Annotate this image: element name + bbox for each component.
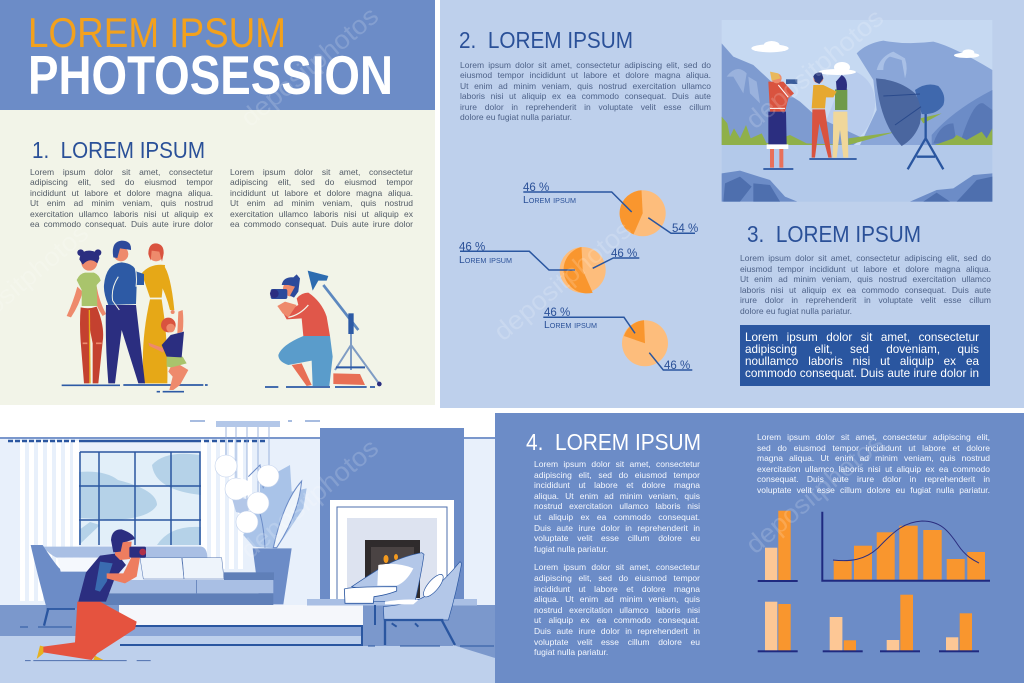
small bar chart 5	[939, 613, 979, 652]
clouds	[751, 41, 979, 75]
text block: section 1 column 1: Lorem ipsum dolor sit amet, consectetur	[30, 166, 213, 176]
text block: section 4 right column: consequat. Duis aute irure dolor in reprehenderit in	[757, 474, 990, 484]
text block: section 3: Lorem ipsum dolor sit amet, consectetur adipiscing elit, sed do	[740, 253, 991, 263]
text block: section 4 paragraph 2: aliqua. Ut enim ad minim veniam, quis	[534, 594, 700, 604]
watermark: depositphotos	[235, 432, 384, 565]
text block: section 4 paragraph 1	[534, 459, 700, 554]
small bar chart 4	[880, 595, 920, 652]
mother	[142, 243, 175, 383]
text block: section 4 paragraph 1: Lorem ipsum dolor sit amet, consectetur	[534, 459, 700, 469]
small bar chart 1	[758, 511, 798, 582]
text block: section 4 paragraph 1: incididunt ut labore et dolore magna	[534, 480, 700, 490]
heading 4: 4. LOREM IPSUM	[526, 429, 701, 455]
callout: section 3 highlighted text: commodo consequat. Duis aute irure dolor in	[745, 367, 979, 380]
panel: dark blue section background	[495, 413, 1024, 683]
text block: section 3	[740, 253, 991, 316]
illustration: kneeling photographer with studio light	[265, 271, 382, 387]
pie chart 2: Lorem ipsum	[459, 255, 512, 266]
rug	[119, 605, 363, 646]
videographer	[763, 72, 797, 169]
text block: section 1 column 1: exercitation ullamco laboris nisi ut aliquip ex	[30, 209, 213, 219]
left mountain	[722, 43, 863, 145]
text block: section 4 paragraph 1: Duis aute irure dolor in reprehenderit in	[534, 523, 700, 533]
text block: section 4 paragraph 2: incididunt ut labore et dolore magna	[534, 584, 700, 594]
histogram with curve	[822, 512, 990, 581]
panel: title banner background	[0, 0, 435, 110]
text block: section 4 right column: magna aliqua. Ut enim ad minim veniam, quis nostrud	[757, 453, 990, 463]
pie chart 1: 46 %	[523, 182, 549, 194]
panel: cream section background	[0, 110, 435, 405]
illustration: mountain photoshoot scene	[722, 20, 992, 202]
pie chart 1	[523, 182, 698, 236]
sweater	[283, 293, 330, 336]
wall	[0, 438, 495, 606]
text block: section 4 paragraph 2: fugiat nulla pariatur.	[534, 647, 608, 657]
panel: light blue section background	[440, 0, 1024, 408]
right mountain	[932, 90, 992, 145]
pie chart 1: Lorem ipsum	[523, 195, 576, 206]
text block: section 4 paragraph 1: aliqua. Ut enim ad minim veniam, quis	[534, 491, 700, 501]
kneeling photographer in room	[25, 529, 151, 661]
sofa	[31, 545, 274, 626]
text block: section 1 column 1: ea commodo consequat. Duis aute irure dolor	[30, 219, 213, 229]
heading 2: 2. LOREM IPSUM	[459, 27, 633, 53]
text block: section 4 right column: Lorem ipsum dolor sit amet, consectetur adipiscing elit,	[757, 432, 990, 442]
text block: section 4 paragraph 2: voluptate velit esse cillum dolore eu	[534, 637, 700, 647]
text block: section 4 right column: voluptate velit esse cillum dolore eu fugiat nulla pariatur.	[757, 485, 990, 495]
child	[148, 310, 188, 390]
text block: section 2: laboris nisi ut aliquip ex ea commodo consequat. Duis aute	[460, 91, 711, 101]
title: photosession: PHOTOSESSION	[28, 44, 393, 106]
heading 1: 1. LOREM IPSUM	[32, 137, 205, 163]
text block: section 1 column 2: Ut enim ad minim veniam, quis nostrud	[230, 198, 413, 208]
text block: section 3: laboris nisi ut aliquip ex ea commodo consequat. Duis aute	[740, 285, 991, 295]
text block: section 2: irure dolor in reprehenderit in voluptate velit esse cillum	[460, 102, 711, 112]
text block: section 3: eiusmod tempor incididunt ut labore et dolore magna aliqua.	[740, 264, 991, 274]
text block: section 1 column 1: adipiscing elit, sed do eiusmod tempor	[30, 177, 213, 187]
callout: section 3 highlighted text: adipiscing elit, sed doveniam, quis	[745, 343, 979, 356]
pendant lamp	[215, 427, 279, 533]
rocks	[722, 171, 797, 202]
far mountain	[857, 41, 992, 145]
pie chart 2: 46 %	[459, 242, 485, 254]
text block: section 3: dolore eu fugiat nulla pariatur.	[740, 306, 852, 316]
window	[79, 452, 201, 545]
girl	[67, 249, 106, 383]
text block: section 4 right column	[757, 432, 990, 495]
ground	[722, 145, 992, 202]
light stand	[308, 271, 382, 386]
text block: section 1 column 2: Lorem ipsum dolor sit amet, consectetur	[230, 166, 413, 176]
ground lines	[62, 385, 208, 392]
pie chart 1: 54 %	[672, 223, 698, 235]
pie chart 3: Lorem ipsum	[544, 320, 597, 331]
callout: section 3 highlighted text: noullamco laboris nisi ut aliquip ex ea	[745, 355, 979, 368]
text block: section 4 right column: exercitation ullamco laboris nisi ut aliquip ex ea commodo	[757, 464, 990, 474]
father	[104, 241, 145, 383]
text block: section 4 paragraph 2: Lorem ipsum dolor sit amet, consectetur	[534, 562, 700, 572]
head	[283, 281, 298, 296]
text block: section 4 paragraph 1: adipiscing elit, sed do eiusmod tempor	[534, 470, 700, 480]
callout: section 3 highlighted text	[740, 325, 990, 386]
text block: section 4 paragraph 2: nostrud exercitation ullamco laboris nisi	[534, 605, 700, 615]
illustration: living room scene	[0, 421, 495, 683]
small bar chart 3	[823, 617, 863, 652]
text block: section 2: Lorem ipsum dolor sit amet, consectetur adipiscing elit, sed do	[460, 60, 711, 70]
text block: section 4 paragraph 2: Duis aute irure dolor in reprehenderit in	[534, 626, 700, 636]
title: lorem ipsum: LOREM IPSUM	[28, 9, 286, 56]
text block: section 1 column 1: incididunt ut labore et dolore magna aliqua.	[30, 188, 213, 198]
watermark: depositphotos	[740, 427, 889, 560]
text block: section 1 column 1	[30, 166, 213, 229]
pie chart 3: 46 %	[544, 307, 570, 319]
back foot	[292, 363, 365, 386]
text block: section 2: eiusmod tempor incididunt ut labore et dolore magna aliqua.	[460, 70, 711, 80]
armchairs	[344, 553, 462, 645]
camera	[271, 289, 287, 299]
ground lines	[265, 384, 375, 389]
text block: section 2	[460, 60, 711, 122]
pie chart 2	[459, 242, 639, 293]
text block: section 3: Ut enim ad minim veniam, quis nostrud exercitation ullamco	[740, 274, 991, 284]
fireplace	[307, 428, 477, 606]
floor dashes	[20, 627, 494, 646]
grass	[722, 113, 992, 145]
text block: section 4 paragraph 2	[534, 562, 700, 657]
illustration: family posing	[62, 241, 208, 392]
text block: section 4 paragraph 1: voluptate velit esse cillum dolore eu	[534, 533, 700, 543]
text block: section 1 column 2: adipiscing elit, sed do eiusmod tempor	[230, 177, 413, 187]
couple	[809, 72, 857, 159]
watermark: depositphotos	[740, 2, 889, 135]
pie chart 3	[543, 307, 692, 372]
umbrella light	[876, 78, 944, 169]
watermark: depositphotos	[488, 214, 637, 347]
text block: section 1 column 1: Ut enim ad minim veniam, quis nostrud	[30, 198, 213, 208]
text block: section 4 paragraph 1: nostrud exercitation ullamco laboris nisi	[534, 501, 700, 511]
floor	[0, 605, 495, 636]
heading 3: 3. LOREM IPSUM	[747, 221, 921, 247]
text block: section 1 column 2	[230, 166, 413, 229]
ceiling strip	[190, 420, 320, 422]
text block: section 4 paragraph 1: ut aliquip ex ea commodo consequat.	[534, 512, 700, 522]
text block: section 2: Ut enim ad minim veniam, quis nostrud exercitation ullamco	[460, 81, 711, 91]
text block: section 1 column 2: exercitation ullamco laboris nisi ut aliquip ex	[230, 209, 413, 219]
text block: section 4 paragraph 1: fugiat nulla pariatur.	[534, 544, 608, 554]
small bar chart 2	[758, 602, 798, 652]
trousers	[278, 336, 333, 386]
plant	[243, 465, 307, 604]
pie chart 3: 46 %	[664, 360, 690, 372]
text block: section 4 right column: sed do eiusmod tempor incididunt ut labore et dolore	[757, 443, 990, 453]
curtains	[20, 441, 252, 601]
sky	[722, 20, 992, 145]
text block: section 1 column 2: incididunt ut labore et dolore magna aliqua.	[230, 188, 413, 198]
text block: section 3: irure dolor in reprehenderit in voluptate velit esse cillum	[740, 295, 991, 305]
text block: section 4 paragraph 2: ut aliquip ex ea commodo consequat.	[534, 615, 700, 625]
callout: section 3 highlighted text: Lorem ipsum dolor sit amet, consectetur	[745, 330, 979, 344]
text block: section 2: dolore eu fugiat nulla pariatur.	[460, 112, 572, 122]
curtain rod	[8, 440, 75, 442]
text block: section 4 paragraph 2: adipiscing elit, sed do eiusmod tempor	[534, 573, 700, 583]
watermark: depositphotos	[235, 0, 384, 133]
text block: section 1 column 2: ea commodo consequat. Duis aute irure dolor	[230, 219, 413, 229]
pie chart 2: 46 %	[611, 248, 637, 260]
